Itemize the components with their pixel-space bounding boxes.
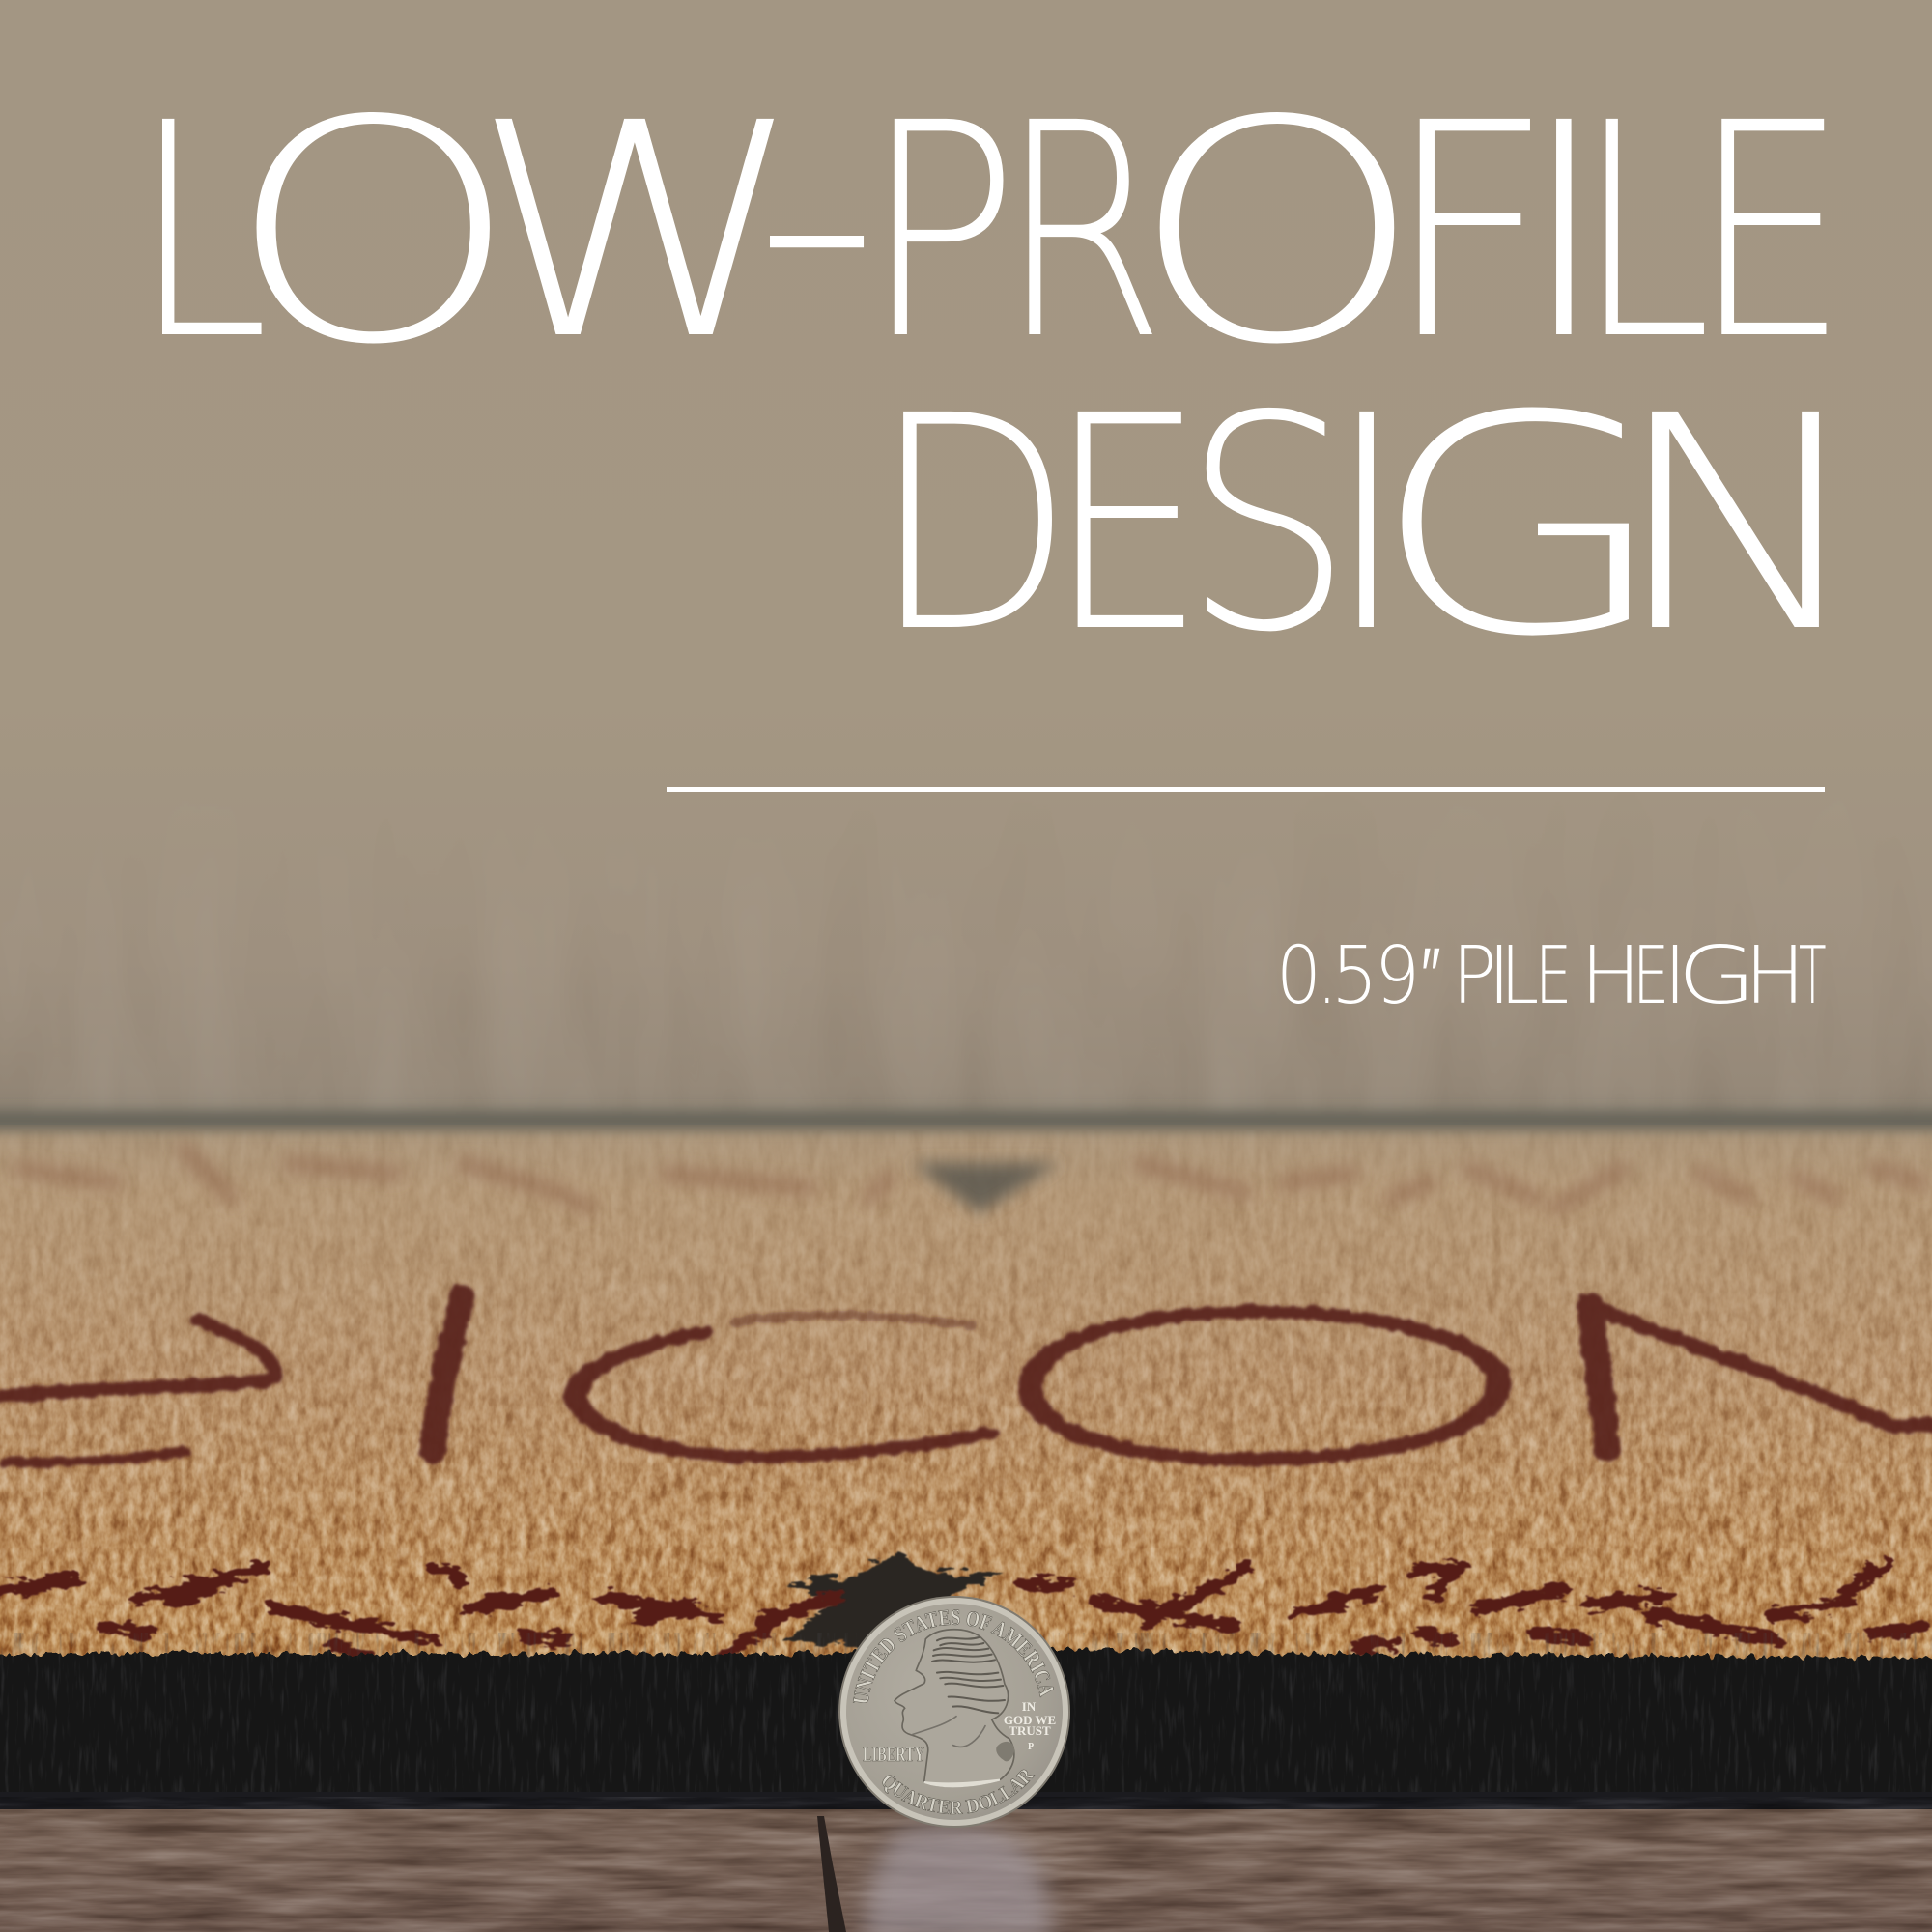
title line 1: L (131, 61, 269, 405)
text: 0 (1276, 930, 1321, 1022)
text: I (1325, 354, 1408, 697)
text: G (1370, 352, 1670, 702)
near star motif (784, 1550, 1005, 1647)
text: H (1580, 930, 1641, 1022)
rubber backing strip (0, 1792, 1932, 1809)
text: I (1663, 930, 1687, 1022)
text: D (871, 354, 1074, 697)
text: H (1745, 930, 1805, 1022)
wall mottling (0, 773, 1932, 1130)
title line 1: L (1577, 61, 1712, 405)
text: G (1677, 930, 1757, 1022)
coin reflection on floor (865, 1823, 1051, 1932)
wall backdrop (0, 0, 1932, 1130)
coin word liberty: LIBERTY (863, 1743, 924, 1766)
letter E lower stroke (6, 1452, 185, 1463)
text: T (1799, 930, 1827, 1022)
text: 9 (1375, 930, 1420, 1022)
coin motto (1004, 1699, 1056, 1752)
coin motto: P (1028, 1742, 1034, 1752)
title line 1: W (471, 61, 806, 405)
blurred far border pattern (19, 1150, 1922, 1208)
title line 1: - (753, 49, 881, 393)
text: P (1452, 930, 1496, 1022)
text: S (1182, 354, 1353, 697)
letters C and O, flattened by perspective (576, 1312, 1498, 1460)
ponytail bow (996, 1742, 1014, 1761)
title line 1: E (1691, 61, 1848, 405)
divider rule (667, 787, 1825, 792)
coin motto: TRUST (1009, 1723, 1051, 1738)
photo: coir doormat with a quarter on a wood floor (0, 949, 1932, 1932)
hair waves (932, 1637, 1005, 1713)
woven mat lettering (0, 1297, 1932, 1463)
text: L (1500, 930, 1539, 1022)
coin edge (838, 1596, 1070, 1828)
title line 2 (871, 352, 1872, 702)
text: 5 (1331, 930, 1378, 1022)
title line 1: I (1520, 61, 1607, 405)
text: ″ (1421, 930, 1440, 1022)
coir fibre texture, soft (0, 1130, 1932, 1671)
title line 1: O (226, 56, 520, 412)
pile height label (1276, 930, 1827, 1022)
letter O (1031, 1312, 1498, 1460)
title line 1: F (1383, 61, 1555, 405)
letter N diagonal (1584, 1304, 1932, 1426)
wood floor (0, 1809, 1932, 1932)
dark far edge of the mat (0, 1111, 1932, 1130)
text: N (1609, 354, 1872, 697)
coin denomination: QUARTER DOLLAR (883, 1770, 1036, 1814)
coin rim (840, 1598, 1068, 1826)
coin legend: UNITED STATES OF AMERICA (852, 1609, 1054, 1703)
near vine border pattern (0, 1565, 1922, 1659)
floor plank crack (817, 1816, 846, 1932)
title line 1: P (862, 61, 1019, 405)
text: E (1047, 354, 1206, 697)
coin face (846, 1604, 1063, 1820)
letter C (576, 1332, 987, 1457)
wood grain texture (0, 1809, 1932, 1932)
text: . (1318, 930, 1337, 1022)
coir mat surface (0, 1125, 1932, 1671)
quarter coin (838, 1596, 1070, 1828)
text: I (1488, 930, 1511, 1022)
band fibre highlights (0, 1666, 1932, 1792)
letter C faint top (739, 1316, 968, 1325)
title line 1: R (1000, 61, 1165, 405)
blurred far star motif (912, 1163, 1060, 1213)
coir fibre texture, in focus (0, 1233, 1932, 1660)
title line 1 (131, 49, 1848, 636)
title line 1: O (1129, 56, 1425, 412)
text: E (1633, 930, 1669, 1022)
letter N (1590, 1306, 1607, 1449)
letter E fragment (0, 1320, 276, 1397)
black mat side band (0, 1648, 1932, 1804)
Washington portrait (895, 1630, 1014, 1786)
coin motto: GOD WE (1004, 1713, 1056, 1727)
jaw and neck line (911, 1717, 985, 1747)
coin motto: IN (1022, 1699, 1037, 1714)
letter I (433, 1297, 462, 1452)
bust highlight (924, 1780, 1000, 1786)
text: E (1535, 930, 1572, 1022)
